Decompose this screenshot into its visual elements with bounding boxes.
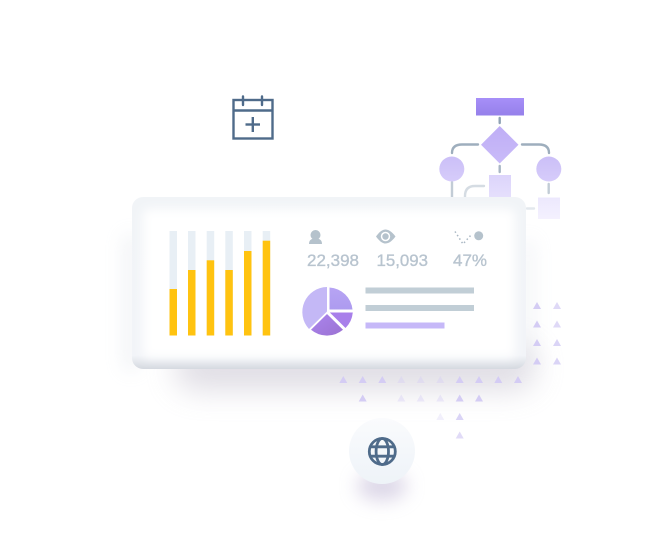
triangle dot pattern	[339, 302, 561, 438]
flowchart diamond	[481, 126, 518, 164]
flowchart top rectangle	[476, 98, 524, 116]
stat: percent: 47%	[453, 251, 487, 270]
flowchart right square	[538, 198, 560, 219]
flowchart right circle	[536, 156, 561, 182]
flowchart centre square	[489, 175, 511, 199]
icon: conversion dots	[455, 231, 483, 244]
globe button	[349, 418, 415, 501]
pie chart	[302, 287, 353, 336]
stat: views: 15,093	[376, 251, 428, 270]
stat: users: 22,398	[307, 251, 359, 270]
dashboard card	[132, 197, 526, 369]
flowchart left circle	[439, 156, 464, 182]
card shadow	[124, 235, 535, 390]
bar chart	[170, 231, 270, 336]
text lines	[366, 288, 474, 328]
flowchart diagram	[439, 98, 561, 219]
icon: calendar	[234, 96, 272, 138]
icon: user	[309, 230, 322, 244]
icon: eye	[376, 230, 396, 244]
icon: globe	[369, 438, 395, 464]
